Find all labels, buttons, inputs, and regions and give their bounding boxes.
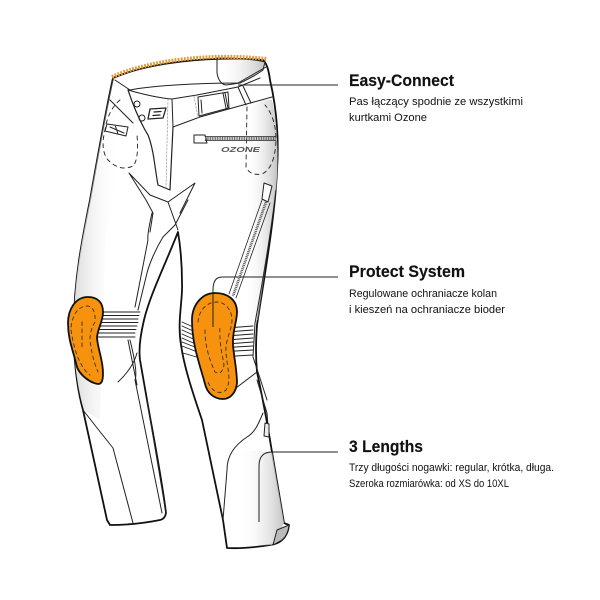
- belt buckle: [198, 92, 229, 116]
- description: Protect System: i kieszeń na ochraniacze bioder: [349, 304, 505, 316]
- right leg side seam: [236, 190, 276, 437]
- callout: Protect System: [349, 262, 505, 316]
- description: Easy-Connect: [349, 96, 523, 124]
- left knee pad: [68, 297, 103, 384]
- description: 3 Lengths: [349, 462, 554, 490]
- leader line: 3 Lengths: [259, 452, 338, 522]
- description: Protect System: Regulowane ochraniacze kolan: [349, 288, 497, 300]
- left knee ribs: [97, 312, 140, 337]
- belt loop: [238, 86, 251, 105]
- right knee ribs: [182, 322, 253, 358]
- lower right leg hem panel: [223, 413, 263, 520]
- heel tab: [273, 525, 289, 545]
- description: Easy-Connect: kurtkami Ozone: [349, 112, 427, 124]
- crotch star seams: [129, 173, 195, 310]
- pants outline: [74, 59, 289, 548]
- leader line: Protect System: [213, 277, 338, 327]
- thigh zipper: [229, 183, 272, 298]
- shading right thigh: [245, 100, 277, 320]
- waistband front: [115, 67, 272, 127]
- brand logo: OZONE: [221, 145, 261, 154]
- heading: Easy-Connect: Easy-Connect: [349, 71, 454, 90]
- chest zipper: [194, 135, 276, 143]
- ankle zipper: [264, 423, 269, 437]
- callout: Easy-Connect: [349, 71, 523, 124]
- waist orange stitching: [112, 57, 267, 77]
- description: 3 Lengths: Szeroka rozmiarówka: od XS do 10XL: [349, 478, 509, 490]
- heading: 3 Lengths: 3 Lengths: [349, 437, 423, 456]
- description: 3 Lengths: Trzy długości nogawki: regular, krótka, długa.: [349, 462, 554, 474]
- heading: Protect System: Protect System: [349, 262, 465, 281]
- leader line: Easy-Connect: [238, 84, 338, 86]
- waist logo: [148, 108, 166, 119]
- callout: 3 Lengths: [349, 437, 554, 490]
- right knee pad: [192, 293, 237, 399]
- snap buttons: [134, 101, 145, 121]
- waistband back panel: [217, 58, 265, 85]
- lower left leg seams: [118, 340, 166, 513]
- fly: [128, 90, 173, 190]
- shading left leg: [74, 78, 120, 420]
- left side patch: [105, 124, 128, 136]
- shading right hem: [240, 450, 284, 546]
- description: Easy-Connect: Pas łączący spodnie ze wszystkimi: [349, 96, 523, 108]
- description: Protect System: [349, 288, 505, 316]
- left pocket dashes: [103, 100, 138, 168]
- pants illustration: [68, 57, 289, 548]
- right pocket dashes: [246, 105, 276, 174]
